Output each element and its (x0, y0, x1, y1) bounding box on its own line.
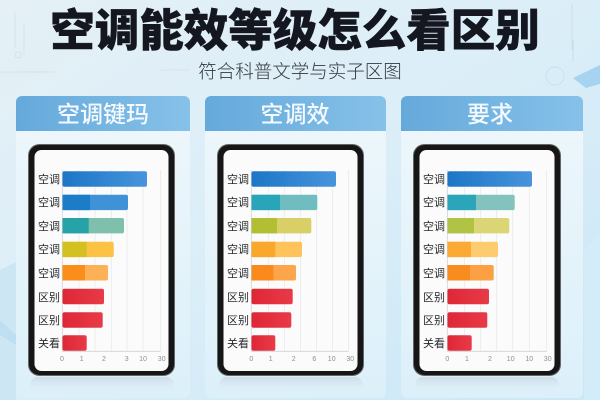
panel heading (205, 96, 386, 131)
category labels: 区别 (38, 314, 60, 327)
axis ticks: 6 (312, 356, 316, 363)
category labels (227, 172, 249, 350)
category labels: 区别 (227, 291, 249, 304)
axis ticks: 2 (102, 356, 106, 363)
axis ticks: 1 (80, 356, 84, 363)
phone screen (420, 150, 554, 371)
category labels: 空调 (227, 195, 249, 209)
category labels: 空调 (423, 219, 445, 233)
category labels: 空调 (423, 195, 445, 209)
bar chart (423, 170, 552, 363)
axis ticks: 0 (60, 356, 64, 363)
subtitle: 符合科普文学与实子区图 (198, 61, 402, 82)
category labels: 空调 (38, 266, 60, 280)
category labels: 空调 (38, 172, 60, 186)
category labels (38, 172, 60, 350)
bars (252, 171, 336, 351)
category labels: 区别 (227, 314, 249, 327)
category labels (423, 172, 445, 350)
phone reflection (219, 377, 363, 395)
category labels: 关看 (38, 336, 60, 350)
axis ticks: 2 (488, 356, 492, 363)
panel heading: 要求 (467, 101, 513, 127)
category labels: 关看 (423, 336, 445, 350)
axis ticks: 30 (158, 356, 166, 363)
axis ticks: 10 (525, 356, 533, 363)
category labels: 空调 (227, 219, 249, 233)
category labels: 区别 (38, 291, 60, 304)
category labels: 空调 (423, 172, 445, 186)
panel: 要求 (401, 96, 583, 398)
category labels: 区别 (423, 291, 445, 304)
axis ticks: 10 (328, 356, 336, 363)
category labels: 空调 (38, 219, 60, 233)
panel heading: 空调效 (260, 101, 330, 127)
bar chart (38, 170, 166, 363)
axis ticks: 0 (249, 356, 253, 363)
category labels: 空调 (38, 242, 60, 256)
bars (448, 171, 532, 351)
phone screen (34, 150, 168, 371)
panel heading (16, 96, 190, 131)
axis ticks (249, 356, 354, 363)
phone reflection (30, 377, 174, 395)
category labels: 空调 (227, 266, 249, 280)
panel heading: 空调键玛 (57, 101, 149, 127)
panel heading (401, 96, 583, 131)
axis ticks: 3 (125, 356, 129, 363)
axis ticks: 30 (346, 356, 354, 363)
phone frame (28, 144, 174, 376)
category labels: 空调 (227, 172, 249, 186)
category labels: 空调 (423, 266, 445, 280)
category labels: 空调 (227, 242, 249, 256)
axis ticks: 0 (445, 356, 449, 363)
phone reflection (415, 377, 559, 395)
phone frame (414, 144, 560, 376)
category labels: 空调 (423, 242, 445, 256)
panel: 空调键玛 (16, 96, 190, 398)
category labels: 关看 (227, 336, 249, 350)
category labels: 空调 (38, 195, 60, 209)
phone screen (224, 150, 358, 371)
axis ticks: 1 (269, 356, 273, 363)
title: 空调能效等级怎么看区别 (50, 7, 540, 56)
category labels: 区别 (423, 314, 445, 327)
phone frame (218, 144, 364, 376)
axis ticks: 2 (292, 356, 296, 363)
bars (62, 171, 147, 351)
axis ticks (60, 356, 166, 363)
axis ticks (445, 356, 552, 363)
axis ticks: 1 (465, 356, 469, 363)
axis ticks: 10 (139, 356, 147, 363)
axis ticks: 30 (544, 356, 552, 363)
panel: 空调效 (205, 96, 386, 398)
bar chart (227, 170, 354, 363)
axis ticks: 10 (507, 356, 515, 363)
